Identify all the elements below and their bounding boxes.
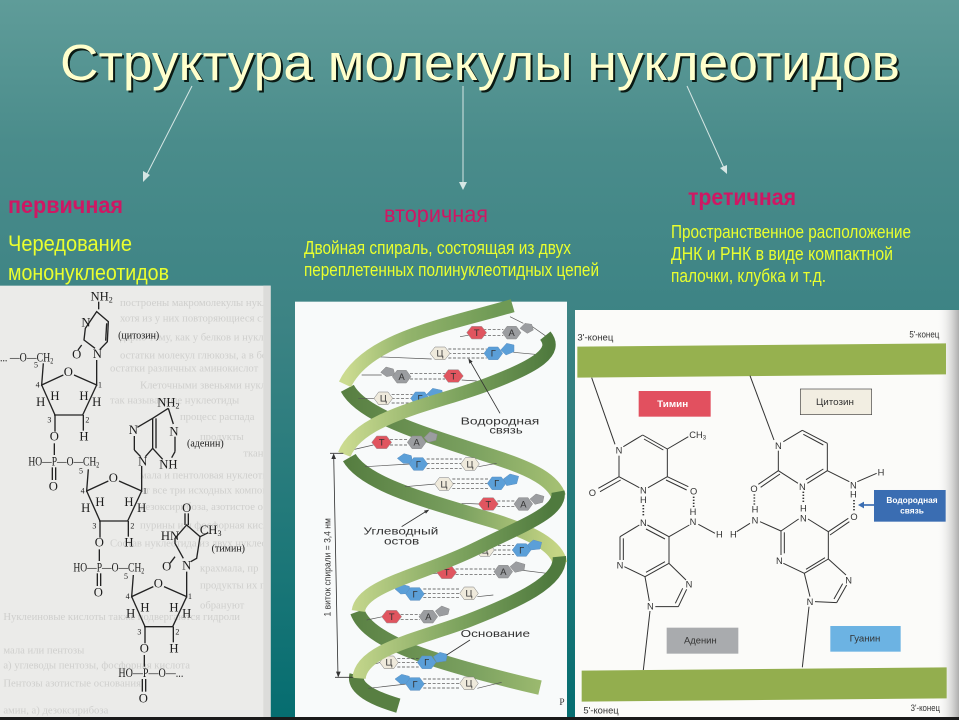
pair 9 (453, 540, 542, 556)
pair 8: Т (485, 499, 491, 509)
molecule: thymine-adenine: N (616, 446, 622, 456)
text: primary description: мононуклеотидов (8, 260, 169, 285)
page mark: Р (559, 698, 565, 708)
cytosine: N (81, 316, 91, 330)
molecule: thymine-adenine: N (640, 486, 647, 496)
nucleotide unit 1: 5 (34, 360, 38, 369)
label box: guanine (830, 626, 901, 652)
adenine: 2 (175, 402, 179, 411)
nucleotide unit 2: HO—P—O—CH (73, 560, 163, 574)
nucleotide unit 2: H (124, 495, 134, 509)
arrow: to primary structure (143, 86, 192, 182)
pair 5: А (414, 438, 421, 448)
end labels: 3'-конец (911, 703, 941, 713)
label: sugar backbone: остов (384, 536, 419, 547)
pair 10 (403, 562, 547, 579)
molecule: thymine-adenine: H (716, 530, 723, 540)
panel: tertiary structure base pairs (575, 310, 959, 718)
nucleotide unit 1: H (36, 395, 45, 409)
text: primary description: Чередование (8, 231, 132, 256)
end labels: 5'-конец (583, 706, 619, 716)
pair 5 (352, 432, 437, 450)
text: tertiary description: палочки, клубка и т.д. (671, 266, 826, 286)
molecule: cytosine-guanine: O (850, 512, 858, 522)
molecule: cytosine-guanine: H (800, 504, 807, 514)
pair 6: Ц (467, 459, 474, 469)
thymine: O (182, 501, 191, 515)
faint book text: от все три исходных компонента (140, 485, 288, 496)
end labels (577, 329, 941, 716)
faint book text: процесс распада (180, 412, 255, 423)
molecule: thymine-adenine: CH (689, 430, 703, 440)
nucleotide unit 2: O (94, 586, 103, 600)
pair 1: Т (474, 328, 480, 338)
nucleotide unit 3 (118, 572, 192, 705)
faint book text: продукты их гидр (200, 580, 281, 591)
molecule: cytosine-guanine: N (752, 515, 758, 525)
nucleotide unit 1: HO—P—O—CH (28, 454, 118, 468)
molecule: cytosine-guanine: N (845, 575, 852, 585)
pair 13: Ц (386, 658, 393, 668)
heading: tertiary: третичная (688, 184, 796, 210)
nucleotide unit 3: 5 (124, 572, 128, 581)
pair 13 (365, 652, 447, 669)
nucleotide unit 1: O (49, 480, 58, 494)
callout: hydrogen bond: связь (900, 506, 924, 516)
faint book text: дарно тому, как у белков и нуклеиновых (120, 333, 303, 344)
nucleotide unit 2: H (95, 495, 105, 509)
pair 11 (395, 584, 493, 600)
nucleotide unit 2: O (95, 536, 104, 550)
pair 9: Г (519, 545, 524, 555)
nucleotide unit 3: H (169, 641, 179, 655)
pair 4: Г (417, 394, 423, 404)
nucleotide unit 3: 3 (137, 627, 141, 636)
nucleotide unit 3: H (169, 601, 179, 615)
faint book text: дезоксирибоза, азотистое основание (140, 502, 305, 513)
strand bar: bottom (582, 667, 947, 702)
faint book text (4, 301, 264, 716)
dimension: one helix turn (322, 453, 353, 677)
end labels: 5'-конец (909, 329, 940, 339)
nucleotide unit 2: 5 (79, 466, 83, 475)
heading: secondary: вторичная (384, 201, 488, 227)
label box: thymine (639, 391, 711, 417)
pair 1: А (509, 328, 516, 338)
adenine: (аденин) (187, 439, 224, 450)
pair 14 (368, 674, 502, 690)
pair 2: Ц (437, 349, 444, 359)
molecule: cytosine-guanine: N (799, 482, 806, 492)
molecule: thymine-adenine: N (690, 517, 696, 527)
molecule: thymine-adenine (589, 378, 723, 670)
label box: cytosine (800, 389, 872, 415)
label box: adenine (667, 628, 738, 654)
helix: front strands (344, 306, 559, 678)
cytosine: 2 (109, 296, 113, 305)
faint book text: обрануют (200, 600, 245, 611)
adenine: N (129, 423, 138, 437)
pair 10: А (500, 567, 507, 577)
faint book text: продукты (200, 432, 244, 443)
nucleotide unit 2: O (109, 471, 118, 485)
molecule: cytosine-guanine: N (807, 597, 813, 607)
callout: hydrogen bond (858, 490, 946, 522)
cytosine (72, 290, 159, 362)
adenine (129, 396, 224, 472)
pair 14: Ц (466, 679, 473, 689)
faint book text: хотя из у них повторяющиеся структурные звенья (120, 314, 347, 325)
strand bar: top (577, 343, 946, 378)
cytosine: NH (91, 290, 109, 304)
nucleotide unit 3: O (154, 577, 163, 591)
thymine (161, 501, 245, 574)
cytosine: O (72, 348, 81, 362)
text: secondary description: переплетенных полинуклеотидных цепей (304, 260, 599, 280)
nucleotide unit 1: 2 (85, 416, 89, 425)
faint book text: так называемые нуклеотиды (110, 395, 239, 406)
nucleotide unit 1: H (79, 430, 89, 444)
text: tertiary description (671, 222, 911, 286)
heading: primary: первичная (8, 192, 123, 218)
molecule: cytosine-guanine: O (750, 484, 758, 494)
nucleotide unit 2: 1 (143, 486, 147, 495)
molecule: cytosine-guanine: H (878, 468, 884, 478)
nucleotide unit 2: H (137, 501, 146, 515)
text: tertiary description: Пространственное расположение (671, 222, 911, 242)
faint book text: амин, а) дезоксирибоза (3, 705, 109, 716)
adenine: N (138, 454, 147, 468)
faint book text: Клеточными звеньями нуклеиновых (140, 380, 306, 391)
faint book text: остатки молекул глюкозы, а в белках (120, 350, 288, 361)
label: hydrogen bond: связь (489, 426, 523, 437)
dimension: one helix turn: 1 виток спирали = 3,4 нм (322, 518, 332, 616)
pair 7: Ц (441, 479, 448, 489)
end labels: 3'-конец (577, 333, 614, 343)
pair 12 (367, 606, 449, 623)
pair 6: Г (416, 459, 421, 469)
label box: adenine: Аденин (684, 636, 717, 646)
molecule: thymine-adenine: O (690, 486, 697, 496)
molecule: cytosine-guanine: N (850, 480, 857, 490)
faint book text: мала и пентоловая нуклеотида (140, 470, 278, 481)
panel: primary structure chemical formula (0, 286, 271, 717)
nucleotide unit 3: 1 (188, 592, 192, 601)
nucleotide unit 1: 2 (50, 357, 53, 366)
faint book text: а) углеводы пентозы, фосфорная кислота (3, 660, 190, 671)
text: secondary description: Двойная спираль, состоящая из двух (304, 238, 571, 258)
thymine: O (162, 560, 171, 574)
thymine: CH (200, 523, 217, 537)
nucleotide unit 3: H (140, 601, 150, 615)
nucleotide unit 3: HO—P—O—... (118, 666, 183, 680)
pair 3 (362, 367, 477, 383)
pair 3: Т (450, 371, 456, 381)
faint book text: Состав нуклеотида из двух нуклеотидов (110, 539, 293, 550)
pair 9: Ц (482, 545, 489, 555)
nucleotide unit 3: H (126, 607, 135, 621)
molecule: cytosine-guanine (730, 376, 884, 667)
thymine: N (182, 558, 191, 572)
adenine: NH (157, 396, 175, 410)
label box: thymine: Тимин (657, 399, 688, 409)
label box: cytosine: Цитозин (816, 397, 854, 407)
faint book text: крахмала, пр (200, 564, 258, 575)
faint book text: остатки различных аминокислот (110, 364, 259, 375)
faint book text: пурины и и фосфорная кислота (140, 520, 283, 531)
nucleotide unit 2: 4 (81, 486, 85, 495)
callout: hydrogen bond: Водородная (886, 495, 938, 505)
pair 12: А (425, 612, 432, 622)
nucleotide unit 3: 4 (126, 592, 130, 601)
label: hydrogen bond: Водородная (461, 416, 539, 427)
nucleotide unit 1: H (79, 389, 89, 403)
nucleotide unit 2: H (81, 501, 90, 515)
label: sugar backbone: Углеводный (363, 526, 438, 537)
title: Структура молекулы нуклеотидов (60, 34, 900, 91)
molecule: cytosine-guanine: H (850, 490, 857, 500)
pair 3: А (399, 372, 406, 382)
text: tertiary description: ДНК и РНК в виде компактной (671, 244, 893, 264)
nucleotide unit 2: 2 (130, 522, 134, 531)
faint book text: Нуклеиновые кислоты также подвергаются гидроли (3, 612, 240, 623)
pair 4: Ц (380, 394, 387, 404)
molecule: thymine-adenine: 3 (703, 436, 707, 442)
thymine: (тимин) (212, 544, 245, 555)
pair 8: А (520, 499, 527, 509)
pair 1 (460, 317, 547, 339)
nucleotide unit 1: H (50, 389, 60, 403)
label: sugar backbone (363, 510, 438, 547)
nucleotide unit 2 (73, 466, 147, 600)
molecule: thymine-adenine: N (617, 560, 623, 570)
pair 7 (405, 474, 519, 490)
molecule: cytosine-guanine: N (775, 441, 782, 451)
faint book text: Пентозы азотистые основания (3, 679, 141, 690)
faint book text: мала или пентозы (3, 645, 84, 656)
thymine: 3 (217, 529, 221, 538)
pair 2: Г (491, 349, 496, 359)
pair 10: Т (444, 568, 450, 578)
arrow: to tertiary structure (687, 86, 727, 174)
nucleotide unit 1: 2 (96, 460, 99, 469)
pair 12: Т (389, 612, 395, 622)
bottom edge bar (0, 717, 959, 720)
pair 8 (462, 494, 544, 510)
pair 6 (365, 454, 497, 470)
helix: back strands (347, 388, 560, 706)
molecule: thymine-adenine: H (640, 495, 647, 505)
faint book text: построены макромолекулы нуклеиновых кислот (120, 298, 340, 309)
molecule: cytosine-guanine: H (752, 505, 758, 515)
panel: secondary structure double helix (295, 302, 567, 718)
pair 5: Т (379, 438, 385, 448)
nucleotide unit 2: 2 (141, 566, 144, 575)
nucleotide unit 1 (0, 351, 102, 494)
adenine: N (169, 424, 179, 438)
nucleotide unit 2: 3 (92, 522, 96, 531)
nucleotide unit 3: O (140, 641, 149, 655)
adenine: NH (159, 458, 177, 472)
nucleotide unit 3: H (182, 607, 191, 621)
nucleotide unit 1: ... —O—CH (0, 351, 65, 365)
pair 7: Г (494, 479, 499, 489)
cytosine: N (93, 347, 102, 361)
cytosine: (цитозин) (118, 330, 159, 341)
molecule: cytosine-guanine: H (730, 530, 737, 540)
label: base: Основание (461, 629, 531, 640)
nucleotide unit 1: H (92, 395, 101, 409)
nucleotide unit 1: 4 (36, 380, 40, 389)
faint book text: ткани (243, 449, 269, 460)
molecule: thymine-adenine: N (640, 518, 647, 528)
label: hydrogen bond (461, 358, 539, 437)
molecule: thymine-adenine: H (690, 507, 696, 517)
molecule: thymine-adenine: N (647, 602, 654, 612)
text: primary description (8, 231, 169, 285)
label: base (447, 629, 531, 655)
molecule: thymine-adenine: O (589, 488, 596, 498)
text: secondary description (304, 238, 599, 280)
nucleotide unit 1: O (50, 430, 59, 444)
pair 11: Ц (466, 589, 473, 599)
molecule: cytosine-guanine: N (776, 556, 783, 566)
nucleotide unit 1: 3 (47, 416, 51, 425)
pair 4 (358, 388, 443, 405)
molecule: cytosine-guanine: N (800, 514, 807, 524)
pair 14: Г (412, 679, 418, 689)
base pairs (352, 317, 547, 690)
nucleotide unit 2: H (124, 536, 134, 550)
pair 11: Г (412, 589, 418, 599)
arrow: to secondary structure (459, 86, 467, 190)
nucleotide unit 1: 1 (98, 380, 102, 389)
nucleotide unit 1: O (64, 365, 73, 379)
nucleotide unit 3: O (139, 691, 148, 705)
label box: guanine: Гуанин (850, 634, 880, 644)
molecule: thymine-adenine: N (686, 580, 692, 590)
thymine: HN (161, 529, 179, 543)
pair 13: Г (424, 658, 429, 668)
nucleotide unit 3: 2 (175, 627, 179, 636)
pair 2 (373, 343, 535, 360)
